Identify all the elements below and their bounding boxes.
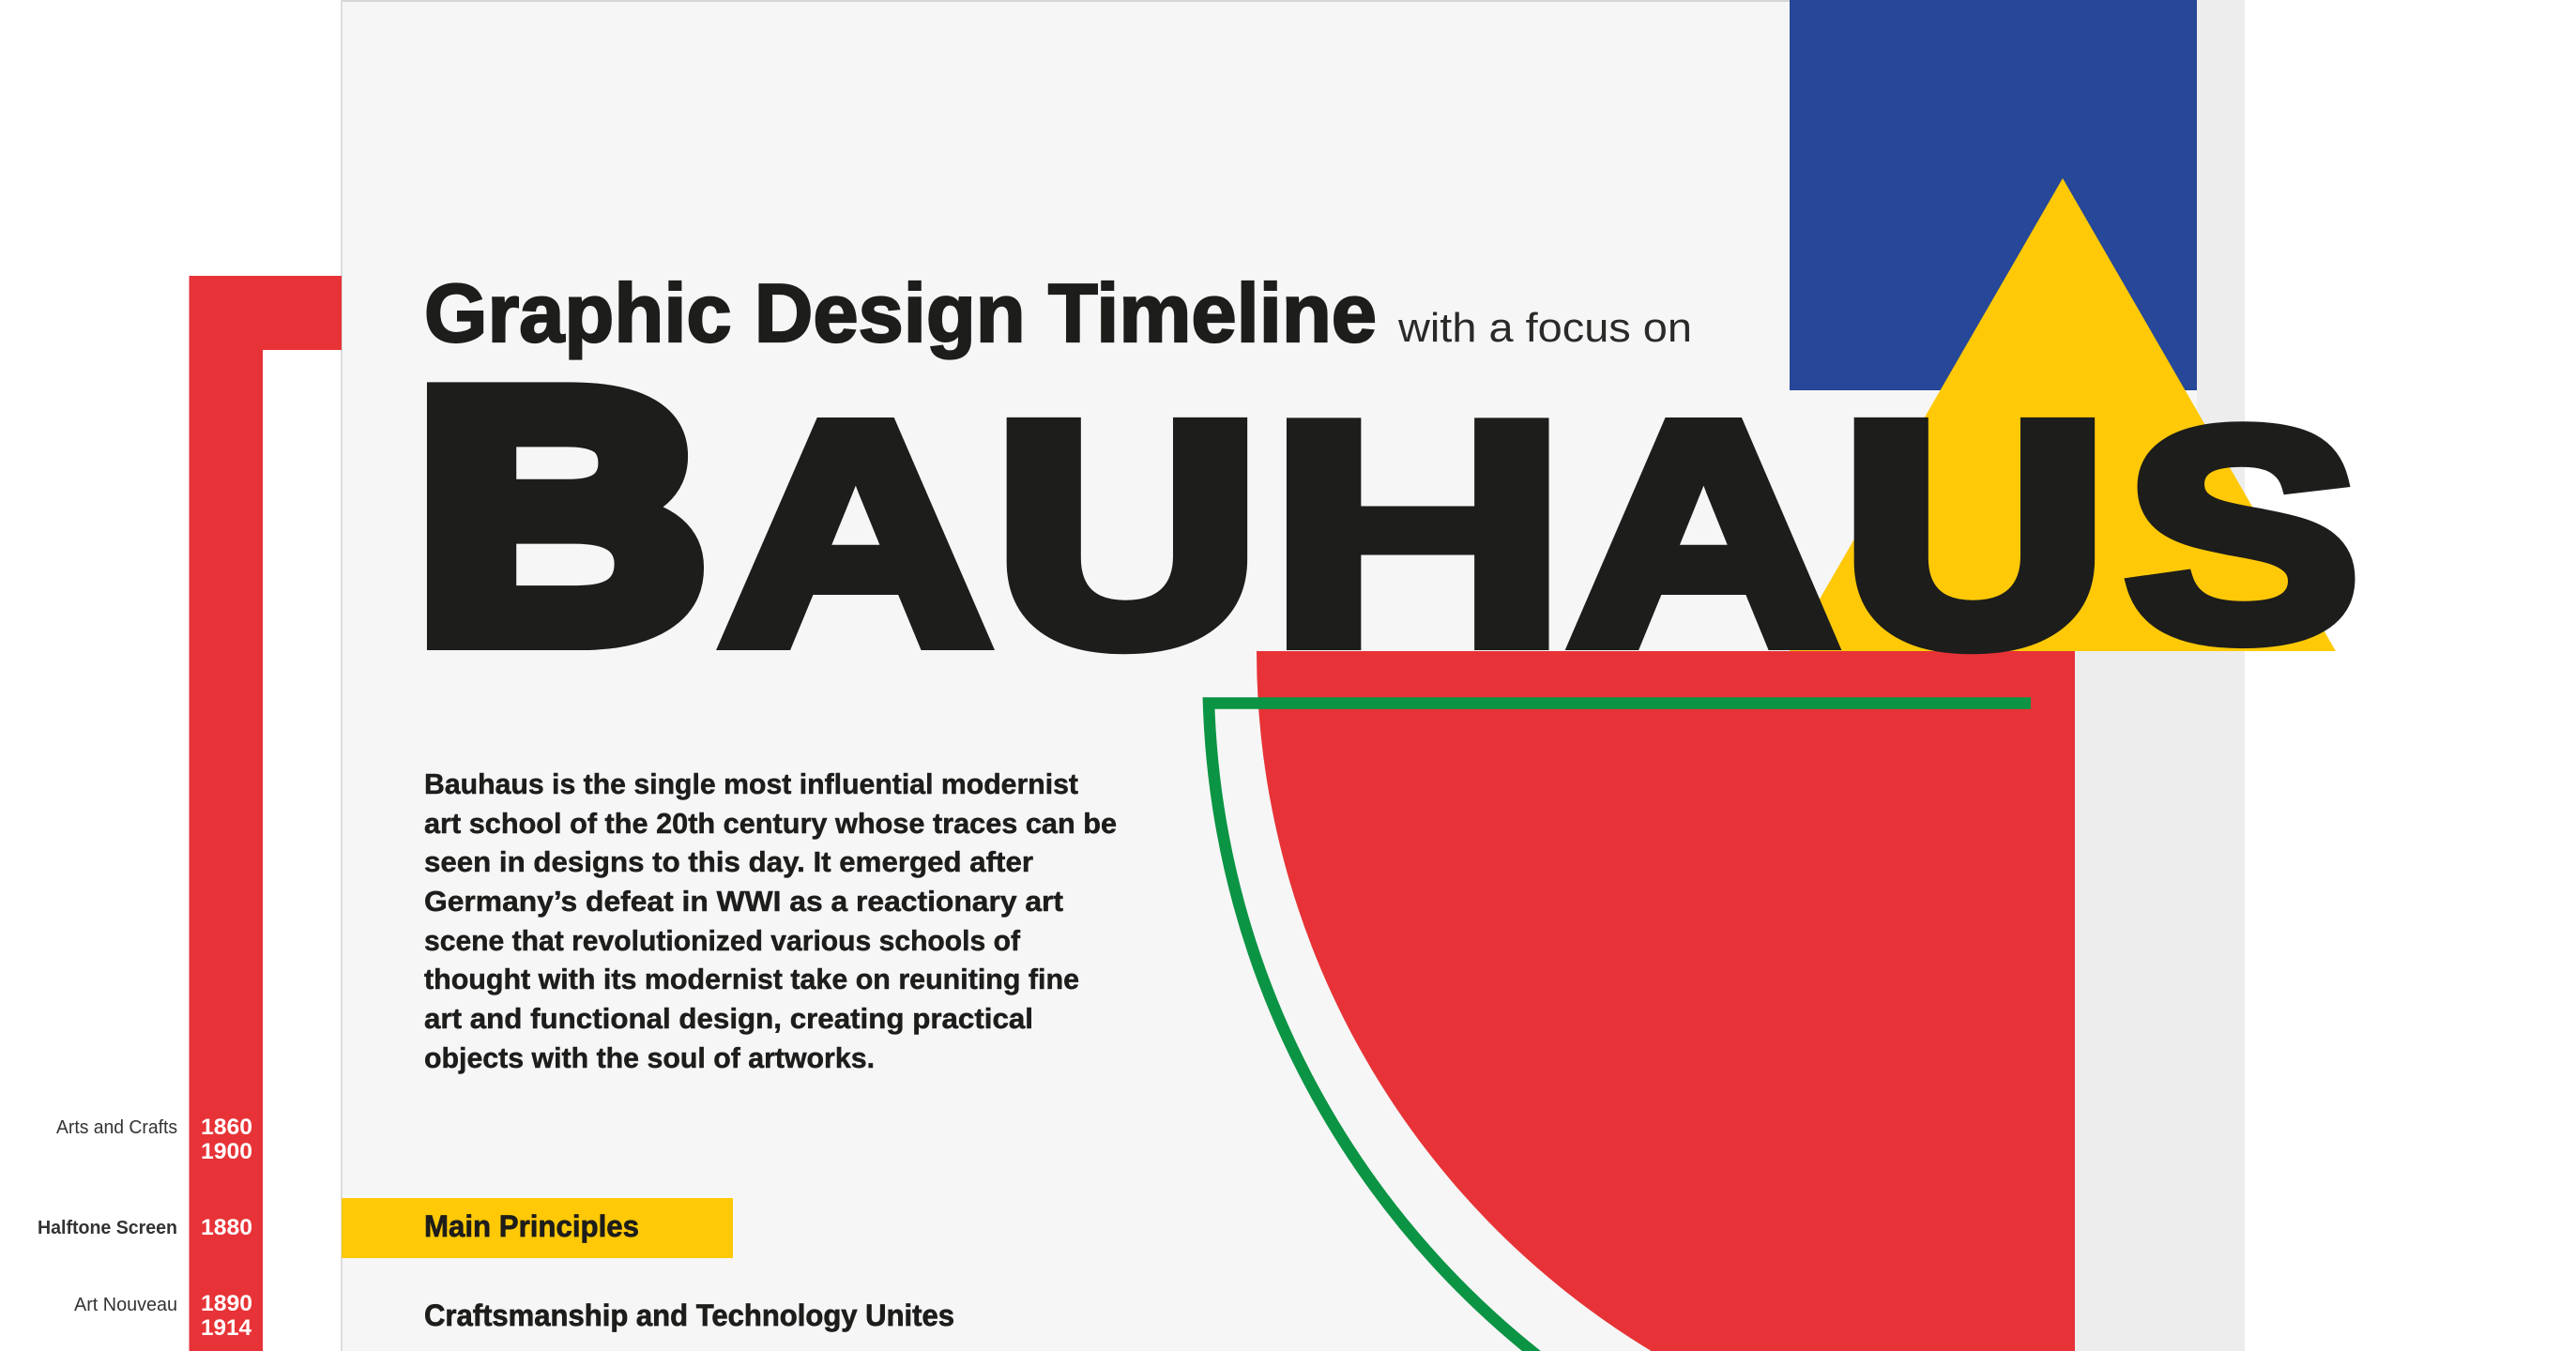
- principle heading: Craftsmanship and Technology Unites: [424, 1298, 954, 1332]
- intro paragraph: seen in designs to this day. It emerged after: [424, 845, 1033, 878]
- panel: light grey page background: [341, 0, 2245, 1351]
- intro paragraph: Bauhaus is the single most influential modernist: [424, 767, 1078, 800]
- intro paragraph: scene that revolutionized various schools of: [424, 924, 1021, 957]
- title: BAUHAUS: S: [2125, 367, 2360, 702]
- timeline entry: Art Nouveau: 1914: [201, 1315, 252, 1341]
- intro paragraph: Germany’s defeat in WWI as a reactionary art: [424, 885, 1063, 918]
- title: BAUHAUS: H: [1265, 353, 1571, 713]
- heading: Graphic Design Timeline: Graphic Design Timeline: [424, 266, 1377, 359]
- title: BAUHAUS: U: [1843, 359, 2106, 708]
- blue square: [1790, 0, 2197, 390]
- intro paragraph: objects with the soul of artworks.: [424, 1041, 875, 1074]
- subheading: with a focus on: with a focus on: [1397, 305, 1692, 351]
- title: BAUHAUS: [416, 321, 2360, 713]
- timeline entry: Art Nouveau: Art Nouveau: [74, 1295, 177, 1315]
- timeline entry: Halftone Screen: [38, 1215, 252, 1240]
- red quarter circle: [1257, 651, 2075, 1351]
- title: BAUHAUS: U: [996, 359, 1258, 708]
- yellow bar: Main Principles: [342, 1198, 733, 1258]
- timeline entry: Art Nouveau: [74, 1291, 252, 1341]
- intro paragraph: [424, 767, 1117, 1074]
- intro paragraph: art school of the 20th century whose traces can be: [424, 807, 1117, 840]
- timeline entry: Arts and Crafts: 1860: [201, 1115, 252, 1140]
- panel: darker grey side band: [2075, 0, 2245, 1351]
- intro paragraph: art and functional design, creating practical: [424, 1002, 1033, 1035]
- title: BAUHAUS: A: [1569, 357, 1838, 709]
- intro paragraph: thought with its modernist take on reuniting fine: [424, 963, 1079, 995]
- yellow triangle: [1790, 178, 2336, 651]
- title: BAUHAUS: B: [416, 321, 707, 711]
- yellow bar: Main Principles: Main Principles: [424, 1209, 639, 1243]
- timeline entry: Arts and Crafts: 1900: [201, 1139, 252, 1164]
- timeline entry: Art Nouveau: 1890: [201, 1291, 252, 1316]
- timeline entry: Arts and Crafts: [56, 1115, 252, 1164]
- timeline entry: Halftone Screen: Halftone Screen: [38, 1218, 177, 1238]
- timeline entry: Arts and Crafts: Arts and Crafts: [56, 1117, 177, 1138]
- title: BAUHAUS: A: [720, 358, 991, 709]
- red timeline bracket: [190, 276, 342, 1351]
- green line and arc: [1209, 704, 2031, 1351]
- timeline entry: Halftone Screen: 1880: [201, 1215, 252, 1240]
